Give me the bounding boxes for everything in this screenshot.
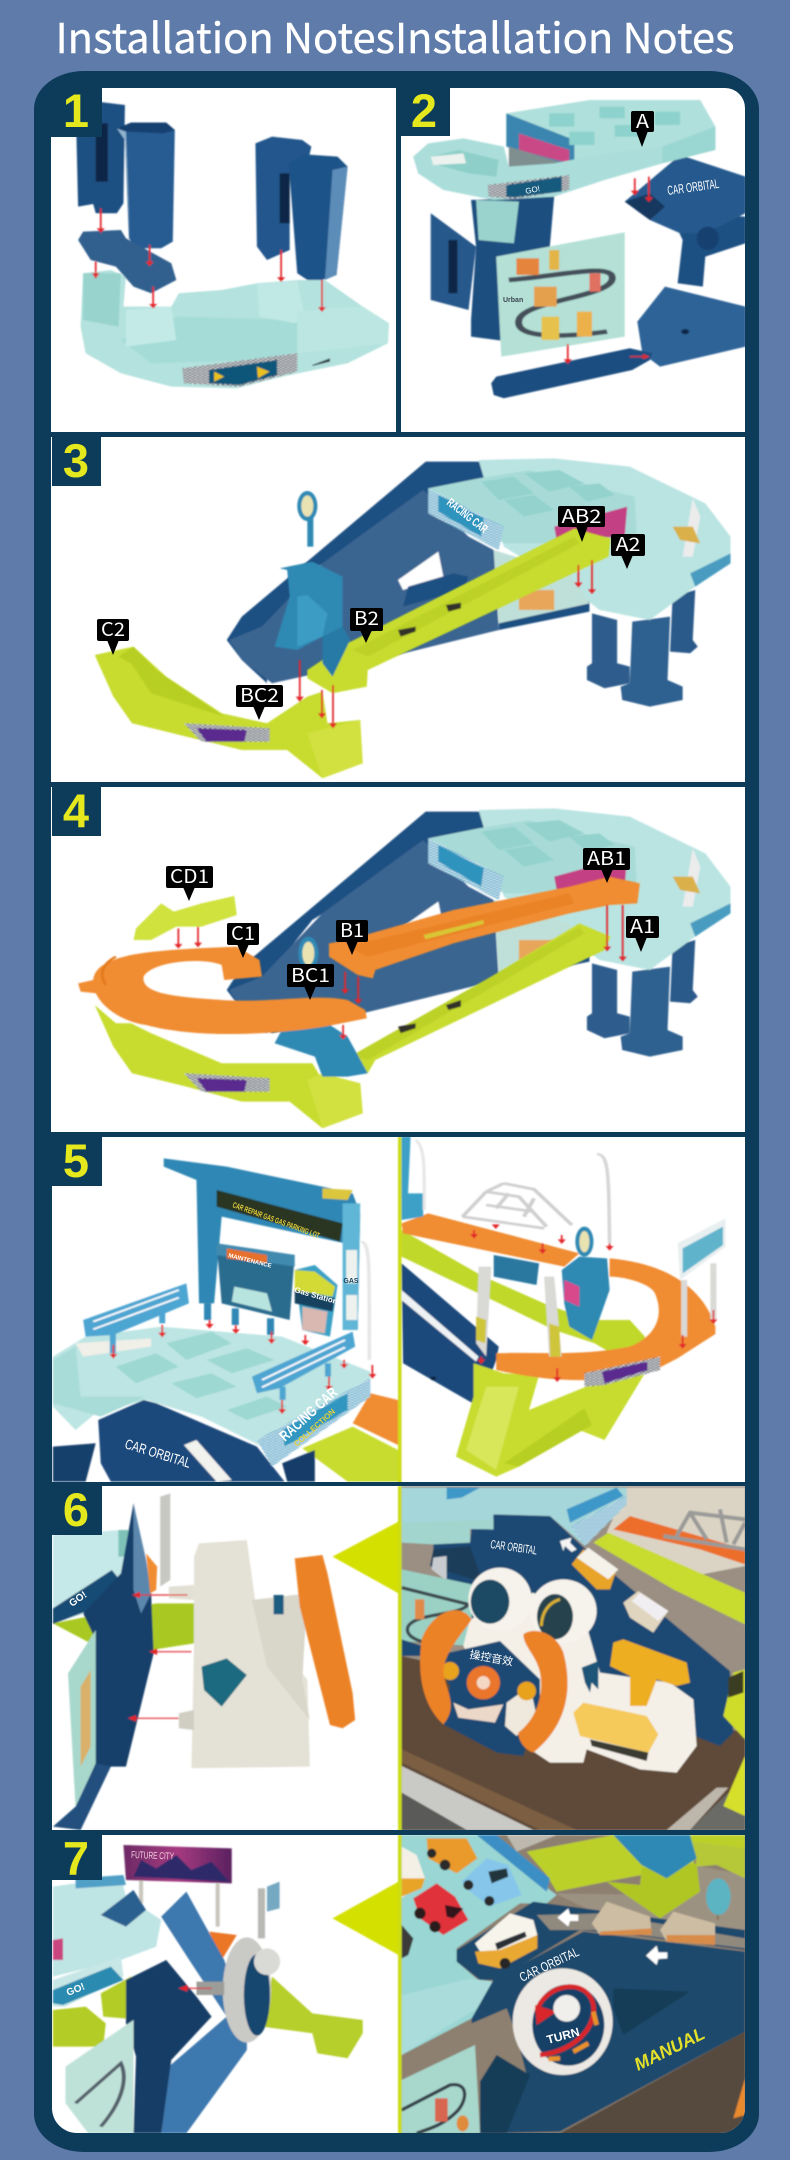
left scene: red arrow	[178, 1985, 212, 1992]
orange wheel	[295, 1555, 355, 1728]
label: AB1: AB1	[587, 844, 626, 871]
right scene: truss bridge	[462, 1183, 572, 1228]
gas label: GAS	[343, 1278, 359, 1285]
blue tower	[275, 562, 350, 677]
step number 6	[52, 1483, 102, 1536]
navy ramp	[457, 1902, 745, 2133]
red arrows	[92, 208, 326, 312]
label: B2: B2	[354, 604, 379, 631]
orange track AB1	[329, 877, 640, 978]
piece CD1	[134, 896, 237, 940]
left scene: deck	[53, 1875, 161, 2007]
pointer triangle	[333, 1880, 402, 1957]
chinese label on wheel: 操控音效	[468, 1647, 514, 1669]
right scene: billboard	[678, 1218, 725, 1337]
label: B1	[336, 916, 368, 955]
manual text: MANUAL	[631, 2023, 708, 2075]
base tray	[81, 270, 389, 388]
left scene: lime track	[53, 1603, 194, 1650]
step number 5	[52, 1134, 102, 1187]
panel: step 6	[52, 1486, 747, 1831]
label: BC2	[236, 681, 283, 720]
car orbital text: CAR ORBITAL	[490, 1537, 538, 1558]
round sign	[298, 936, 319, 964]
left scene: wheel	[196, 1937, 280, 2043]
racing car text: RACING CAR	[276, 1384, 341, 1445]
label: A1: A1	[630, 912, 655, 939]
GO strip text: GO!	[525, 184, 541, 196]
label: AB2	[558, 502, 605, 542]
lime rail	[593, 1533, 745, 1624]
divider line	[398, 1137, 402, 1483]
orange car	[427, 1838, 477, 1873]
right scene: station edge	[402, 1137, 424, 1220]
right scene: ramp	[402, 1263, 499, 1407]
city poster	[402, 2045, 480, 2133]
red arrows	[174, 905, 627, 1040]
panel: step 4	[51, 787, 745, 1132]
white van	[475, 1913, 537, 1969]
left scene: deck	[53, 1530, 129, 1624]
orange corner	[733, 2078, 745, 2118]
GO strip text: GO!	[67, 1590, 89, 1609]
label: C2	[97, 615, 129, 655]
teal deck	[402, 1488, 627, 1546]
step number 3: 3	[63, 434, 89, 487]
orange track U	[78, 947, 367, 1034]
title: Installation NotesInstallation Notes	[56, 5, 734, 65]
support legs	[431, 197, 554, 342]
background and floor	[400, 1835, 747, 2135]
yellow lever	[573, 1639, 690, 1761]
left scene: red arrows	[109, 1320, 376, 1414]
left scene: fences	[83, 1283, 355, 1400]
label: A: A	[636, 107, 649, 134]
blue car	[462, 1858, 522, 1907]
left scene: body	[83, 1503, 157, 1767]
lime track	[527, 1835, 745, 1918]
left scene: maintenance board	[217, 1243, 295, 1320]
label: B2	[350, 604, 383, 643]
right scene	[398, 1486, 747, 1831]
moving vans	[592, 1902, 715, 1945]
future city text: FUTURE CITY	[131, 1850, 174, 1863]
lime track B2	[307, 528, 611, 693]
right scene: orange track	[402, 1213, 715, 1387]
dark car at edge	[402, 1925, 413, 1958]
navy ramp	[433, 1514, 733, 1746]
label: BC1	[287, 961, 334, 1000]
step number 1: 1	[63, 84, 89, 137]
collection text: COLLECTION	[292, 1407, 337, 1448]
right scene: lamp post	[597, 1154, 610, 1243]
label: BC2: BC2	[240, 681, 279, 708]
background and floor	[400, 1486, 747, 1831]
divider line	[398, 1486, 402, 1831]
label: C2: C2	[101, 615, 125, 642]
base stick	[491, 348, 652, 398]
red arrows	[128, 1592, 191, 1722]
step number 4: 4	[63, 784, 89, 837]
CAR ORBITAL logo: CAR ORBITAL	[666, 176, 720, 198]
left scene: lime stand	[53, 2007, 106, 2047]
white car at edge	[402, 1847, 425, 1898]
right scene: green track	[402, 1230, 645, 1477]
left scene: city poster	[65, 2020, 134, 2133]
left scene: lower body	[53, 1763, 111, 1830]
column pieces	[76, 99, 348, 283]
badge	[202, 1658, 247, 1707]
left scene: tracks behind	[302, 1393, 398, 1482]
label: BC1: BC1	[291, 961, 330, 988]
step number 3	[52, 434, 101, 487]
car orbital text: CAR ORBITAL	[123, 1436, 193, 1471]
toy buses	[572, 1548, 668, 1633]
city poster	[496, 232, 625, 357]
white control unit	[169, 1540, 310, 1768]
left scene: orange part	[209, 1932, 237, 1960]
step number 7	[52, 1832, 102, 1885]
panel: step 3	[51, 437, 745, 782]
panel: step 5	[52, 1137, 745, 1483]
ramp opening	[430, 1546, 483, 1583]
lime edge	[723, 1669, 745, 1816]
red arrows	[564, 177, 653, 364]
lime track lower	[95, 923, 611, 1128]
lime track C2	[95, 647, 363, 778]
city poster note: Urban	[503, 297, 523, 304]
station structure	[227, 458, 731, 707]
panel: step 1	[51, 88, 396, 432]
gas station text: Gas Station	[293, 1285, 339, 1306]
gas station texts: CAR REPAIR GAS GAS PARKING LOT	[231, 1200, 321, 1240]
step number 4	[52, 784, 101, 837]
turn text: TURN	[545, 2025, 581, 2047]
RACING CAR side text: RACING CAR	[444, 495, 491, 536]
steering wheel	[420, 1610, 568, 1756]
label: A1	[626, 912, 659, 952]
white console	[463, 1568, 697, 1773]
left scene: blue body	[126, 1892, 247, 2133]
orange track and bridge	[613, 1509, 745, 1564]
blue tower	[613, 1835, 697, 1878]
blue tower base	[275, 1020, 368, 1077]
connector bar	[78, 230, 176, 293]
step number 7: 7	[63, 1832, 89, 1885]
label: CD1	[166, 862, 213, 901]
GO strip text: GO!	[65, 1982, 87, 1999]
arrows	[560, 1538, 598, 1693]
step number 5: 5	[63, 1134, 89, 1187]
label: CD1: CD1	[170, 862, 209, 889]
upper track and parking deck	[413, 100, 715, 200]
left scene: navy ramp	[53, 1378, 370, 1482]
maintenance text: MAINTENANCE	[228, 1253, 272, 1270]
left scene: billboard	[123, 1845, 232, 1927]
label: B1: B1	[340, 916, 364, 943]
left scene: city poster	[68, 1630, 96, 1807]
divider line	[398, 1835, 402, 2135]
label: C1: C1	[231, 919, 255, 946]
turn wheel	[513, 1968, 613, 2075]
stand column	[625, 155, 746, 367]
left scene: gas station arch	[164, 1158, 360, 1335]
left scene: gas station board	[295, 1265, 338, 1337]
step number 1	[51, 84, 102, 137]
right scene: road sign	[476, 1255, 562, 1357]
right scene: red arrows	[470, 1224, 717, 1382]
car orbital text: CAR ORBITAL	[517, 1944, 581, 1985]
left scene: small sign	[258, 1882, 280, 1938]
pointer triangle	[333, 1520, 402, 1595]
label: C1	[227, 919, 259, 958]
teal deck	[402, 1835, 557, 2055]
white arrows	[557, 1908, 667, 1965]
left scene: deck	[53, 1327, 370, 1447]
tree	[706, 1878, 731, 1920]
label: A2	[611, 530, 645, 569]
step number 2: 2	[411, 84, 437, 137]
left scene: stick	[160, 1493, 170, 1587]
right scene: fuel tower	[562, 1227, 610, 1340]
label: A	[631, 107, 654, 147]
label: AB2: AB2	[562, 502, 602, 529]
panel: step 7	[52, 1835, 747, 2135]
station structure	[227, 808, 731, 1057]
red arrows	[296, 560, 596, 729]
step number 6: 6	[63, 1483, 89, 1536]
left scene: lamp post	[361, 1242, 369, 1360]
city poster	[402, 1569, 472, 1656]
left scene: lime slide	[262, 1977, 363, 2058]
step number 2	[401, 84, 450, 137]
round pole sign	[297, 491, 317, 547]
label: AB1	[583, 844, 630, 883]
right scene	[398, 1835, 747, 2135]
red car	[413, 1883, 468, 1935]
panel: step 2	[401, 88, 746, 432]
label: A2: A2	[616, 530, 640, 557]
